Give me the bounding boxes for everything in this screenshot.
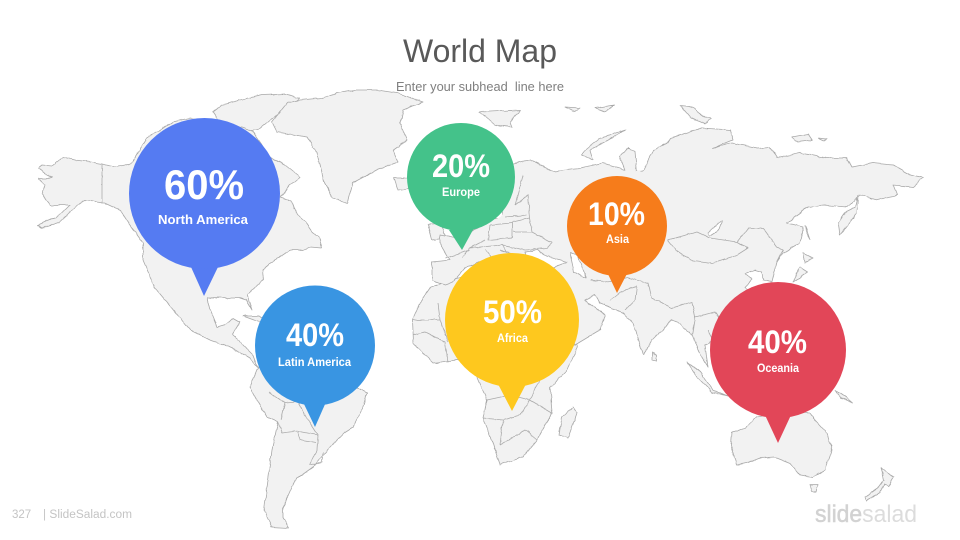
map: Europe land fill — [470, 170, 640, 280]
map: Iceland — [394, 178, 412, 190]
callout: Latin America: Latin America — [278, 355, 351, 369]
map: Sakhalin — [838, 195, 858, 235]
callout: North America: North America — [158, 212, 249, 227]
map: Cuba — [243, 316, 275, 325]
title: World Map — [403, 33, 557, 69]
callout: Oceania: 40% — [748, 324, 807, 360]
map: Great Britain and Ireland — [428, 222, 446, 240]
map: Caspian Sea — [570, 253, 586, 278]
map: northern European islands — [480, 110, 520, 127]
callout: Asia: Asia — [606, 234, 630, 246]
callout: Latin America — [255, 286, 375, 427]
map: South America — [250, 350, 367, 528]
map: Japan — [793, 225, 813, 282]
map: Sumatra and Java — [687, 362, 728, 396]
callout: Latin America: 40% — [286, 317, 344, 353]
footer: site name: | SlideSalad.com — [43, 509, 132, 521]
map: Novaya Zemlya — [582, 130, 625, 160]
map: Africa borders — [412, 303, 552, 445]
map: Madagascar — [559, 407, 577, 438]
callout: North America: 60% — [164, 161, 244, 208]
map: Alaska border — [101, 164, 103, 203]
callout: Africa: Africa — [497, 331, 528, 345]
callout: Europe: Europe — [442, 185, 480, 199]
map: New Zealand — [865, 467, 894, 501]
map: New Guinea — [835, 390, 853, 403]
callout: Africa — [445, 253, 579, 411]
logo: slidesalad: slidesalad — [815, 501, 917, 528]
world map — [38, 90, 923, 528]
map: Europe borders — [445, 175, 552, 262]
map: Africa — [412, 278, 578, 465]
footer: page number: 327 — [12, 509, 31, 521]
map: Asia borders — [590, 228, 783, 345]
map: Tasmania — [810, 484, 818, 492]
callout: Africa: 50% — [483, 294, 542, 330]
map: North America — [38, 118, 322, 368]
map: Sri Lanka — [652, 352, 656, 361]
map: Eurasia — [432, 128, 923, 367]
map: Arctic islands north of Russia — [680, 105, 827, 142]
map: South America borders — [269, 392, 323, 465]
subhead: Enter your subhead line here — [396, 79, 564, 94]
map: Lake Baikal — [708, 220, 722, 236]
callout: Oceania — [710, 282, 846, 443]
callout: Asia — [567, 176, 667, 293]
callout: Europe: 20% — [432, 148, 490, 184]
map: Svalbard — [565, 105, 615, 112]
map: Black Sea — [525, 250, 567, 268]
callout: Europe — [407, 123, 515, 250]
map: Australia — [731, 412, 832, 477]
callout: Asia: 10% — [588, 196, 645, 232]
callout: North America — [129, 118, 280, 296]
map: Greenland — [272, 90, 423, 203]
callout: Oceania: Oceania — [757, 361, 799, 375]
map: Canadian Arctic islands — [213, 94, 300, 130]
